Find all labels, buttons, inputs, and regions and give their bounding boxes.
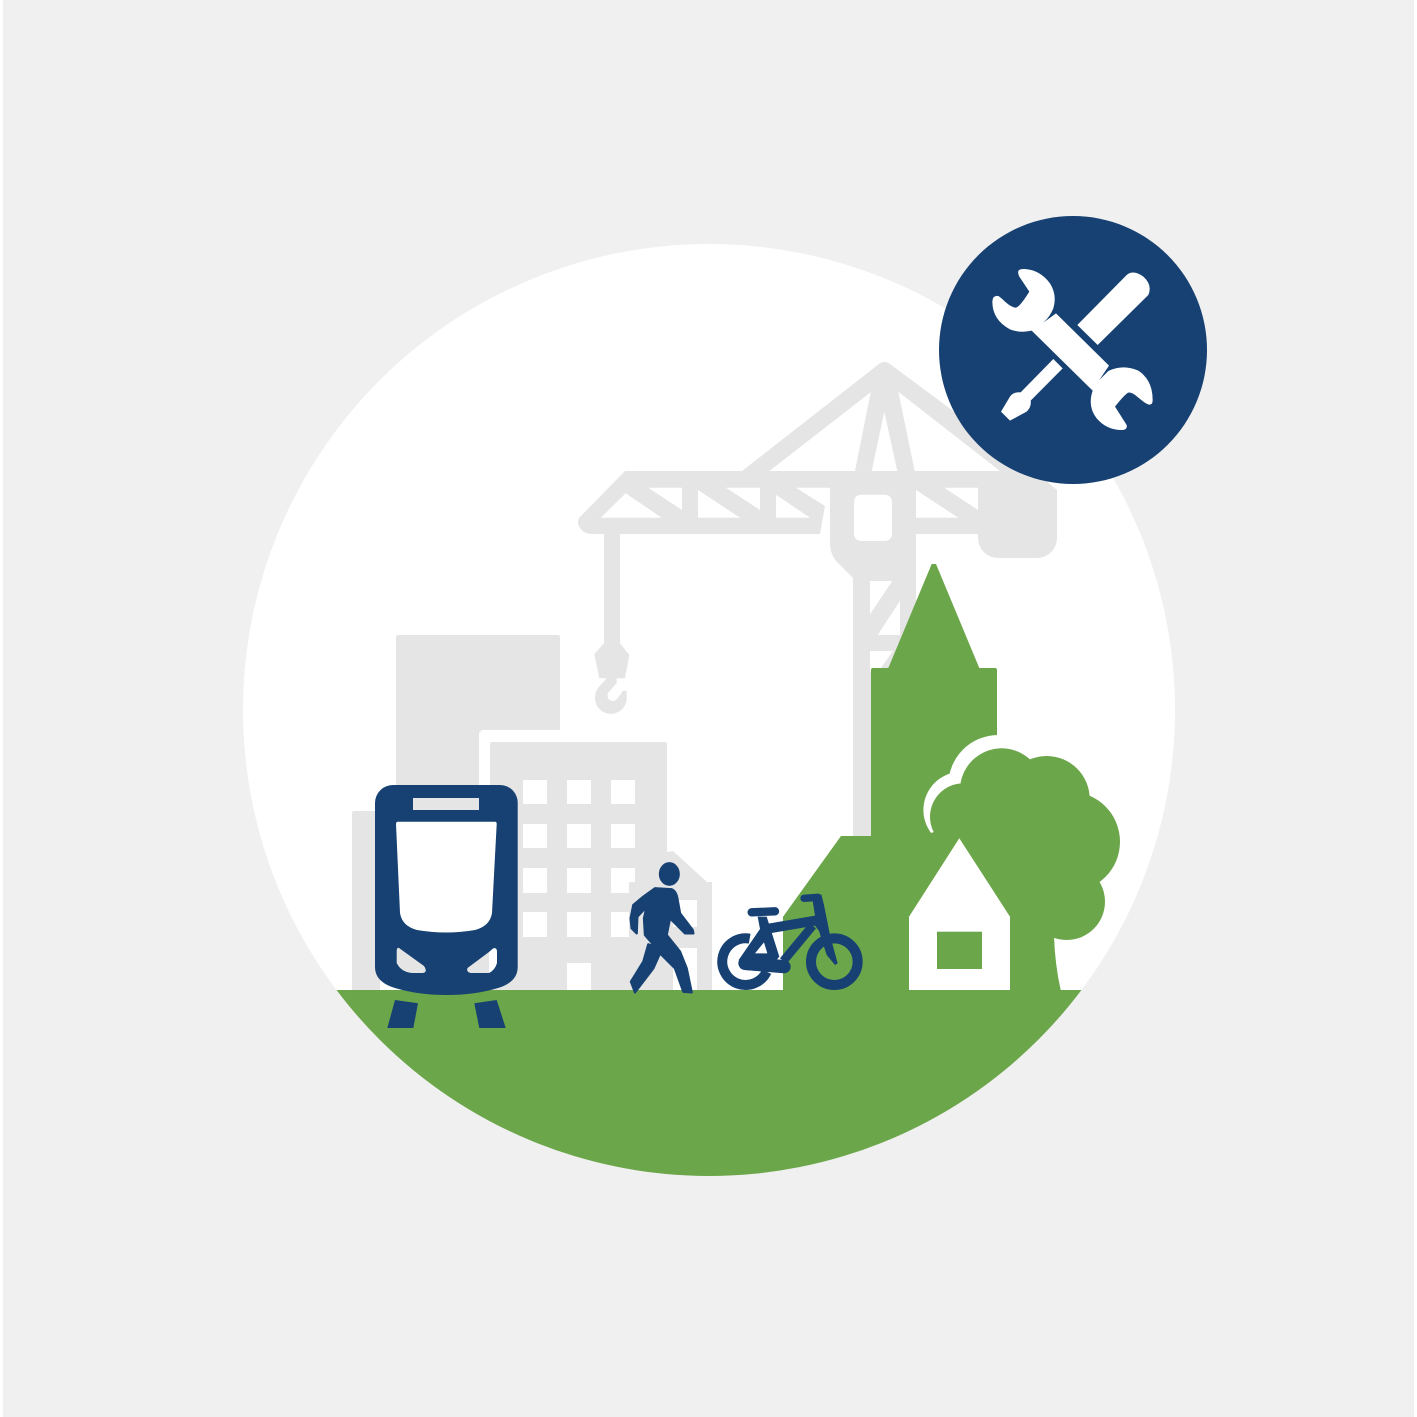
tools badge [939, 216, 1207, 484]
green ground [336, 990, 1082, 1176]
building windows [523, 780, 697, 990]
white halo around tree [923, 735, 1048, 848]
pedestrian [631, 863, 693, 992]
tram headlights [397, 948, 426, 973]
crane cable and hook [594, 534, 629, 714]
icon: wrench and screwdriver [992, 269, 1153, 430]
bicycle [722, 894, 858, 985]
grey buildings [352, 635, 712, 990]
white scene circle [243, 244, 1175, 1176]
tower crane [578, 362, 1057, 836]
house [909, 838, 1010, 990]
tram [375, 785, 518, 1028]
tree [930, 748, 1120, 990]
green church and low building [783, 564, 1020, 990]
tram rails [387, 1000, 418, 1028]
